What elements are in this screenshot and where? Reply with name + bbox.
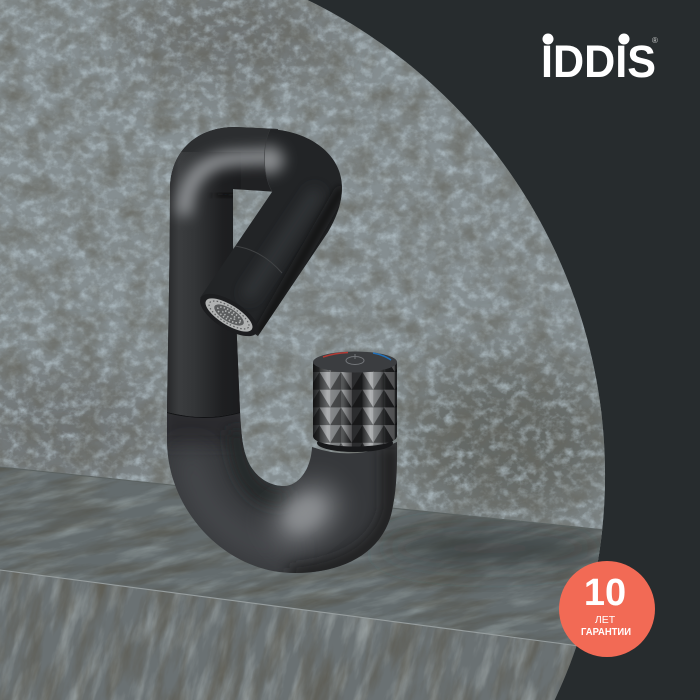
handle collar — [317, 434, 393, 452]
faucet — [160, 120, 405, 580]
badge line 2: ГАРАНТИИ — [581, 627, 631, 638]
badge number: 10 — [584, 572, 626, 614]
logo wordmark: IDDIS — [541, 36, 656, 87]
handle top cap — [313, 352, 397, 372]
faucet spout — [200, 129, 342, 336]
logo: IDDIS — [541, 34, 658, 87]
power icon — [346, 354, 364, 364]
diamond-knurled handle — [313, 360, 397, 448]
red hot mark — [323, 352, 348, 357]
badge circle — [559, 561, 655, 657]
badge line 1: ЛЕТ — [595, 614, 616, 626]
stone wall — [0, 0, 620, 560]
blue cold mark — [373, 353, 391, 360]
registered mark: ® — [652, 36, 658, 45]
stone shelf: front face — [0, 570, 620, 700]
stone shelf: top surface — [0, 467, 620, 657]
shelf edge lines — [0, 467, 610, 650]
warranty badge — [559, 561, 655, 657]
faucet column and top bend — [167, 127, 278, 417]
logo i dots — [542, 34, 630, 44]
faucet shadow on shelf — [375, 526, 605, 570]
faucet lower U-shaped body — [167, 412, 397, 573]
aerator — [194, 286, 264, 344]
